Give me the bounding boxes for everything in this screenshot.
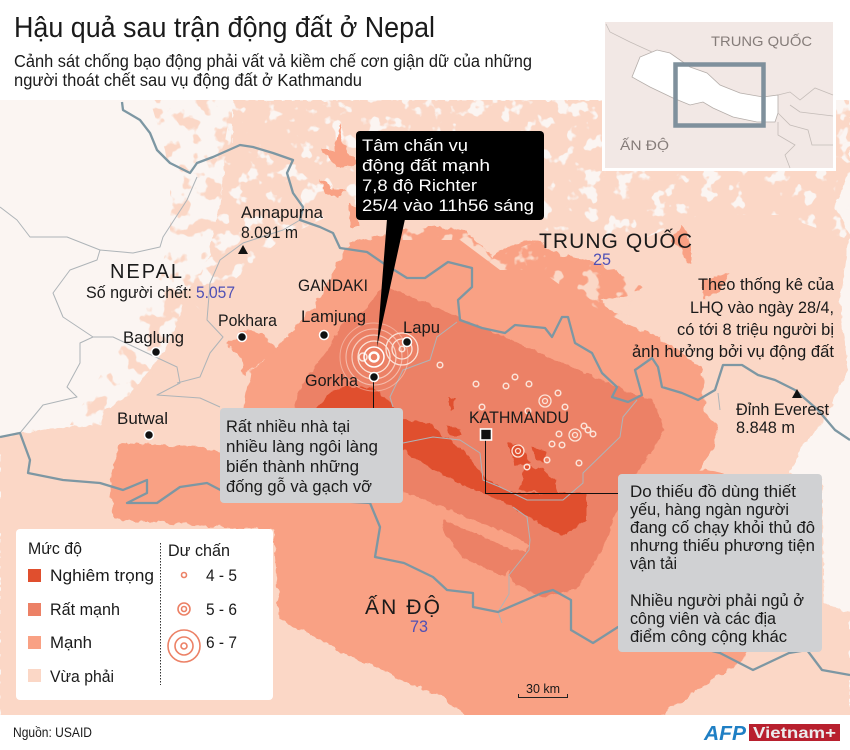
callout: epicentre: 7,8 độ Richter (362, 176, 477, 195)
callout: destroyed villages: nhiều làng ngôi làng (226, 437, 378, 456)
label: Annapurna (238, 203, 324, 254)
legend: aftershock 6-7 (168, 630, 237, 662)
subtitle: người thoát chết sau vụ động đất ở Kathmandu (14, 70, 362, 90)
callout: fleeing the capital: vận tải (630, 554, 677, 573)
place: Baglung (123, 328, 184, 356)
callout: destroyed villages: Rất nhiều nhà tại (226, 417, 350, 436)
note: UN statistics: LHQ vào ngày 28/4, (690, 298, 834, 317)
callout: fleeing the capital (618, 474, 822, 652)
label: Annapurna: Annapurna (241, 203, 324, 222)
logo: Vietnam+: Vietnam+ (753, 725, 836, 742)
callout: fleeing the capital: Do thiếu đồ dùng thiết (630, 482, 796, 501)
legend: aftershock 6-7: 6 - 7 (206, 633, 237, 652)
legend: aftershock 5-6 (178, 600, 237, 619)
legend: aftershock 5-6: 5 - 6 (206, 600, 237, 619)
inset locator map (604, 20, 834, 170)
note: UN statistics: ảnh hưởng bởi vụ động đất (632, 342, 834, 361)
inset: neighbouring boundaries (606, 24, 833, 168)
callout: destroyed villages: biến thành những (226, 457, 359, 476)
place: Lapu: Lapu (403, 318, 440, 337)
inset: Nepal shape (632, 50, 778, 122)
callout: epicentre: 25/4 vào 11h56 sáng (362, 196, 534, 215)
label: Nepal death toll: NEPAL (110, 261, 182, 283)
place: Butwal: Butwal (117, 409, 168, 428)
light flecks west of the moderate zone (70, 100, 232, 425)
zone: strong intensity (110, 125, 760, 725)
callout: fleeing the capital: công viên và các địa (630, 609, 777, 628)
legend: aftershock 4-5: 4 - 5 (206, 566, 237, 585)
label: India toll: ẤN ĐỘ (365, 596, 440, 619)
header background (0, 0, 850, 100)
callout: fleeing the capital: điểm công cộng khác (630, 627, 787, 646)
place: Lamjung (301, 307, 366, 340)
callout: destroyed villages (220, 408, 403, 503)
callout: epicentre (356, 131, 544, 347)
legend: severe: Nghiêm trọng (50, 566, 154, 585)
legend: strong: Mạnh (50, 633, 92, 652)
place: Butwal (117, 409, 168, 440)
pale flecks in the moderate zone (190, 100, 850, 310)
legend: moderate: Vừa phải (50, 667, 114, 686)
place: Pokhara: Pokhara (218, 311, 277, 330)
callout: fleeing the capital: yếu, hàng ngàn người (630, 500, 789, 519)
legend: very strong: Rất mạnh (50, 600, 120, 619)
callout: destroyed villages: đống gỗ và gạch vỡ (226, 477, 372, 496)
place: Lamjung: Lamjung (301, 307, 366, 326)
label: China toll: 25 (593, 250, 611, 269)
epicentre rings (340, 323, 408, 391)
place: Pokhara (218, 311, 277, 342)
aftershock magnitude 6-7 near Lapu (386, 333, 418, 365)
source: Nguồn: USAID (13, 725, 92, 740)
inset label: India: ẤN ĐỘ (620, 137, 669, 153)
label: India toll (365, 596, 440, 636)
zone: very strong intensity (295, 287, 665, 597)
note: UN statistics: Theo thống kê của (698, 275, 835, 294)
inset: zoom rectangle (676, 64, 764, 126)
legend: aftershock heading: Dư chấn (168, 541, 230, 560)
title: Hậu quả sau trận động đất ở Nepal (14, 12, 435, 44)
label: Everest: 8.848 m (736, 418, 795, 437)
note: UN statistics: có tới 8 triệu người bị (677, 320, 834, 339)
callout: fleeing the capital: Nhiều người phải ngủ ở (630, 591, 804, 610)
place: Lapu (402, 318, 440, 346)
label: China toll: TRUNG QUỐC (539, 229, 692, 253)
subtitle (14, 51, 532, 90)
thin regional boundaries (0, 177, 720, 623)
subtitle: Cảnh sát chống bạo động phải vất vả kiềm chế cơn giận dữ của những (14, 51, 532, 71)
international borders (0, 102, 850, 675)
callout: fleeing the capital: nhưng thiếu phương tiện (630, 536, 815, 555)
scale bar (518, 681, 568, 698)
inset label: China: TRUNG QUỐC (711, 32, 812, 49)
place: Gorkha: Gorkha (305, 371, 359, 390)
label: Nepal death toll: Số người chết: (86, 283, 192, 302)
label: China toll (539, 229, 692, 269)
label: Everest (736, 389, 829, 437)
aftershocks magnitude 4-5 (359, 346, 596, 470)
place: Baglung: Baglung (123, 328, 184, 347)
legend panel (16, 529, 273, 700)
callout: epicentre: Tâm chấn vụ (362, 136, 468, 155)
place: Kathmandu with leader line (469, 408, 619, 494)
zone: severe intensity (300, 387, 587, 537)
label: Annapurna: 8.091 m (241, 223, 298, 242)
note: UN statistics (632, 275, 835, 361)
footer background (0, 715, 850, 750)
label: Gandaki: GANDAKI (298, 276, 368, 295)
label: Nepal death toll (86, 261, 235, 302)
callout: fleeing the capital: đang cố chạy khỏi thủ đô (630, 518, 815, 537)
legend: aftershock 4-5 (182, 566, 237, 585)
legend: intensity heading: Mức độ (28, 539, 82, 558)
aftershocks magnitude 5-6 (512, 395, 581, 457)
light flecks along the strong zone edge (345, 225, 660, 335)
label: Nepal death toll: 5.057 (196, 283, 235, 302)
legend: strong (28, 633, 92, 652)
label: India toll: 73 (410, 617, 428, 636)
label: Everest: Đỉnh Everest (736, 400, 829, 419)
place: Gorkha (305, 371, 378, 409)
scale bar: 30 km (526, 681, 560, 696)
place: Kathmandu with leader line: KATHMANDU (469, 408, 569, 427)
callout: epicentre: động đất mạnh (362, 156, 490, 175)
logo: AFP: AFP (703, 723, 747, 745)
